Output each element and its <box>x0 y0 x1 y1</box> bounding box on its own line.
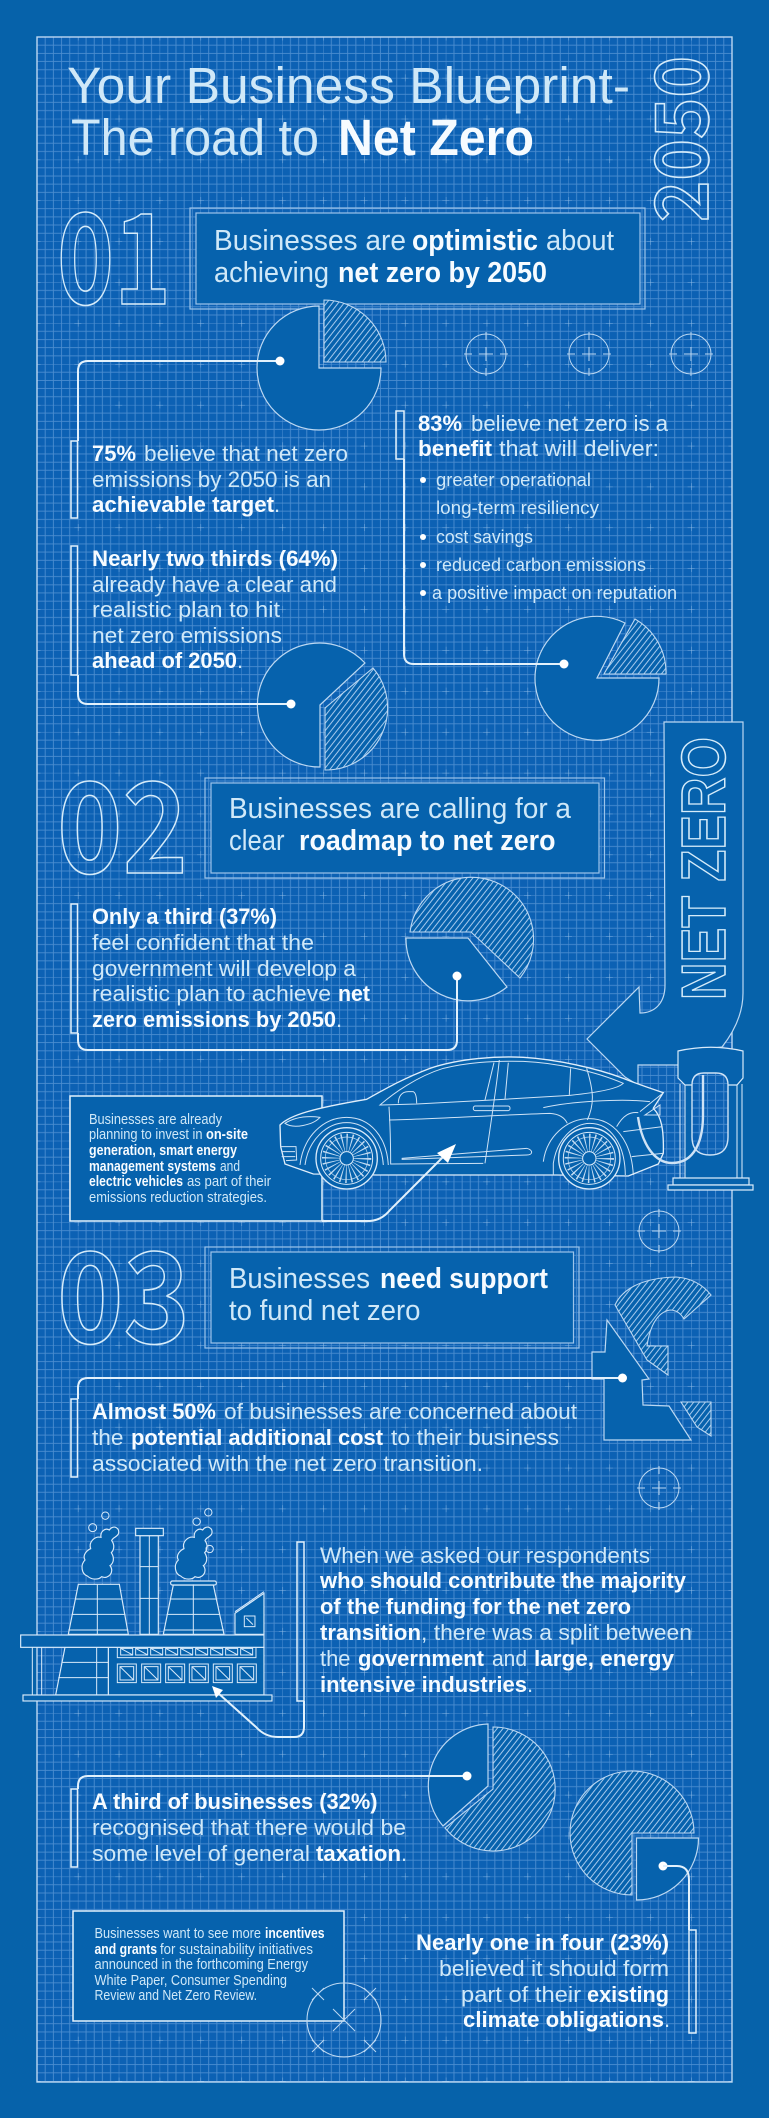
callout: incentives and grants: incentives <box>265 1926 324 1942</box>
callout: investment plans: Businesses are already <box>89 1112 223 1128</box>
callout: incentives and grants: for sustainability initiatives <box>160 1942 313 1958</box>
text: 83% benefit list: benefit <box>418 436 493 461</box>
section 01 heading box: net zero by 2050 <box>338 257 547 289</box>
text: 23% climate obligations: climate obligations <box>463 2007 664 2032</box>
callout: investment plans: and <box>220 1159 240 1175</box>
callout: investment plans: management systems <box>89 1159 216 1175</box>
arrow panel: NET ZERO: NET ZERO <box>670 737 739 1000</box>
text: almost 50%: of businesses are concerned about <box>224 1399 577 1424</box>
section 01 heading box: about <box>546 225 614 257</box>
text: almost 50%: associated with the net zero transition. <box>92 1451 483 1476</box>
illustration: electric car <box>280 1057 663 1189</box>
text: 23% climate obligations: believed it should form <box>439 1956 669 1981</box>
text: 83% benefit list <box>418 411 677 603</box>
connector: factory arrow <box>212 1542 304 1737</box>
text: who should fund: large, energy <box>534 1646 675 1671</box>
arrow: callout to car <box>322 1144 456 1221</box>
connector: 83% <box>396 411 568 668</box>
text: 64% clear plan: Nearly two thirds (64%) <box>92 546 338 571</box>
title: The road to <box>71 109 319 166</box>
text: 83% benefit list: believe net zero is a <box>471 411 669 436</box>
icon: charging station <box>668 1047 753 1190</box>
connector: 23% <box>658 1862 696 2033</box>
connector: 64% <box>71 546 291 704</box>
text: 37% confident: feel confident that the <box>92 930 314 955</box>
pie chart: 37% <box>406 877 534 1001</box>
text: 37% confident: Only a third (37%) <box>92 904 277 929</box>
section 01 heading box: optimistic <box>412 225 538 257</box>
callout: incentives and grants <box>73 1911 344 2021</box>
section 03 heading box: Businesses <box>229 1263 370 1295</box>
pie chart: 23% <box>570 1771 698 1900</box>
section 01 heading box: achieving <box>214 257 329 289</box>
text: 37% confident: net <box>338 981 371 1006</box>
text: 37% confident: realistic plan to achieve <box>92 981 331 1006</box>
text: 23% climate obligations: existing <box>587 1982 669 2007</box>
callout: investment plans: as part of their <box>187 1174 271 1190</box>
text: 32% taxation: taxation <box>316 1841 401 1866</box>
section 02 number: 02 <box>57 728 188 909</box>
text: 64% clear plan <box>92 546 338 673</box>
target: crosshair <box>637 1466 681 1510</box>
connector: 32% <box>71 1772 472 1867</box>
section 03 number: 03 <box>57 1198 190 1379</box>
text: who should fund: , there was a split between <box>421 1620 692 1645</box>
text: who should fund: . <box>527 1672 533 1697</box>
text: who should fund: intensive industries <box>320 1672 527 1697</box>
text: 75% achievable target: believe that net zero <box>144 441 348 466</box>
callout: investment plans: planning to invest in <box>89 1127 202 1143</box>
text: almost 50%: to their business <box>391 1425 559 1450</box>
text: almost 50%: the <box>92 1425 124 1450</box>
title: Net Zero <box>338 109 534 166</box>
section 01 heading box: Businesses are <box>214 225 406 257</box>
text: 32% taxation: . <box>401 1841 407 1866</box>
targets: three crosshairs <box>464 332 713 376</box>
text: 64% clear plan: already have a clear and <box>92 572 337 597</box>
text: almost 50% <box>92 1399 577 1476</box>
text: who should fund: the <box>320 1646 350 1671</box>
callout: investment plans: electric vehicles <box>89 1174 183 1190</box>
text: who should fund: transition <box>320 1620 421 1645</box>
text: who should fund: When we asked our respondents <box>320 1543 650 1568</box>
callout: incentives and grants: and grants <box>94 1942 157 1958</box>
target: crosshair <box>637 1209 681 1253</box>
text: 23% climate obligations: part of their <box>461 1982 581 2007</box>
text: 32% taxation: some level of general <box>92 1841 310 1866</box>
text: almost 50%: potential additional cost <box>131 1425 384 1450</box>
section 02 heading box: clear <box>229 825 285 857</box>
text: 64% clear plan: net zero emissions <box>92 623 282 648</box>
title: Your Business Blueprint- <box>67 57 630 114</box>
illustration: factory <box>21 1509 272 1701</box>
text: 37% confident: . <box>336 1007 342 1032</box>
text: 83% benefit list: reduced carbon emissions <box>436 555 646 575</box>
text: 75% achievable target <box>92 441 348 517</box>
text: 37% confident <box>92 904 371 1032</box>
section 01 heading box <box>190 208 645 309</box>
callout: investment plans: emissions reduction strategies. <box>89 1190 267 1206</box>
text: 83% benefit list: a positive impact on reputation <box>432 583 677 603</box>
section 03 heading box <box>205 1247 579 1348</box>
text: 23% climate obligations: . <box>664 2007 670 2032</box>
section 03 heading box: to fund net zero <box>229 1295 420 1327</box>
text: 75% achievable target: 75% <box>92 441 136 466</box>
pie chart: 32% <box>428 1724 555 1851</box>
text: 37% confident: zero emissions by 2050 <box>92 1007 336 1032</box>
arrow panel: NET ZERO <box>587 722 743 1085</box>
text: 64% clear plan: . <box>237 648 243 673</box>
callout: investment plans <box>70 1096 322 1221</box>
text: who should fund: and <box>492 1646 527 1671</box>
callout: incentives and grants: Businesses want to see more <box>94 1926 261 1942</box>
pie chart: 64% <box>88 643 388 770</box>
rotated outline label: 2050: 2050 <box>624 56 730 222</box>
callout: incentives and grants: White Paper, Consumer Spending <box>94 1973 287 1989</box>
pie chart: 83% <box>535 616 666 740</box>
text: almost 50%: Almost 50% <box>92 1399 216 1424</box>
charging cable <box>638 1075 703 1163</box>
text: 23% climate obligations: Nearly one in four (23%) <box>416 1930 669 1955</box>
pie chart: 75% <box>257 300 386 430</box>
callout: incentives and grants: Review and Net Zero Review. <box>94 1988 257 2004</box>
section 02 heading box: roadmap to net zero <box>299 825 556 857</box>
section 02 heading box <box>205 778 604 878</box>
text: 83% benefit list: cost savings <box>436 527 533 547</box>
target: large circle with crosses <box>307 1983 381 2057</box>
text: 37% confident: government will develop a <box>92 956 357 981</box>
text: 32% taxation <box>92 1789 407 1866</box>
callout: investment plans: generation, smart energy <box>89 1143 237 1159</box>
text: 83% benefit list: that will deliver: <box>499 436 659 461</box>
text: 64% clear plan: realistic plan to hit <box>92 597 280 622</box>
text: 75% achievable target: . <box>274 492 280 517</box>
connector: 75% <box>71 356 284 518</box>
text: 75% achievable target: achievable target <box>92 492 275 517</box>
text: who should fund: government <box>358 1646 485 1671</box>
text: who should fund: who should contribute the majority <box>319 1568 687 1593</box>
text: who should fund: of the funding for the net zero <box>320 1594 631 1619</box>
connector: almost 50% <box>71 1374 627 1477</box>
section 03 heading box: need support <box>380 1263 548 1295</box>
text: 75% achievable target: emissions by 2050 is an <box>92 467 331 492</box>
text: 64% clear plan: ahead of 2050 <box>92 648 237 673</box>
connector: 37% <box>71 904 462 1050</box>
text: 83% benefit list: long-term resiliency <box>436 498 599 518</box>
section 01 number: 01 <box>57 159 171 340</box>
callout: investment plans: on-site <box>206 1127 248 1143</box>
section 02 heading box: Businesses are calling for a <box>229 793 572 825</box>
text: 23% climate obligations <box>416 1930 670 2032</box>
text: who should fund <box>319 1543 692 1697</box>
text: 32% taxation: A third of businesses (32%) <box>92 1789 378 1814</box>
text: 32% taxation: recognised that there would be <box>92 1815 406 1840</box>
text: 83% benefit list: 83% <box>418 411 462 436</box>
callout: incentives and grants: announced in the forthcoming Energy <box>94 1957 309 1973</box>
icon: pound sign <box>592 1277 711 1440</box>
title <box>67 57 630 166</box>
text: 83% benefit list: greater operational <box>436 470 591 490</box>
